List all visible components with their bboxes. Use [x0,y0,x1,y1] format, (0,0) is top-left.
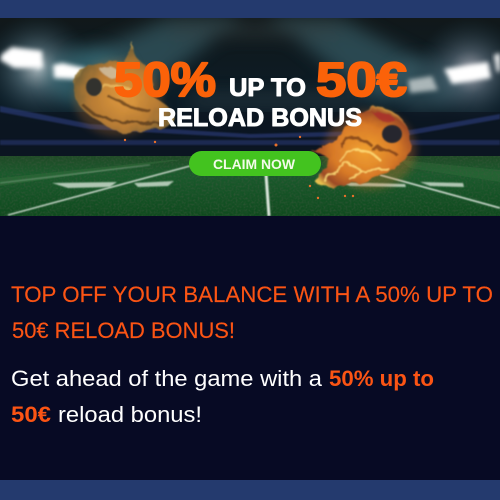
heading text: TOP OFF YOUR BALANCE WITH A 50% UP TO [11,282,493,307]
crowd stands bands [0,106,500,146]
heading text: 50€ RELOAD BONUS! [12,318,235,343]
headline: 50%: 50% [114,54,216,107]
claim now button [189,151,321,176]
stadium lights: right [390,26,500,112]
icon: flaming ball right [124,108,416,199]
body paragraph: Get ahead of the game with a [11,366,323,391]
body paragraph: reload bonus! [58,402,202,427]
headline: reload bonus: RELOAD BONUS [158,104,362,132]
top bar [0,0,500,18]
headline: 50 euro: 50€ [316,54,407,107]
banner headline [114,61,408,126]
body paragraph: 50€ [11,402,52,427]
football field [0,156,500,216]
icon: flaming ball left [74,42,175,136]
promotional banner [0,13,500,216]
stadium light beams [70,18,430,105]
claim now button: CLAIM NOW [213,156,296,172]
body paragraph [11,366,434,427]
headline: up to: UP TO [229,74,306,102]
yard numbers [52,181,464,188]
body paragraph: 50% up to [329,366,434,391]
yard lines [0,165,500,216]
bottom bar [0,480,500,500]
heading text [11,282,493,343]
stadium lights: left [0,21,124,112]
